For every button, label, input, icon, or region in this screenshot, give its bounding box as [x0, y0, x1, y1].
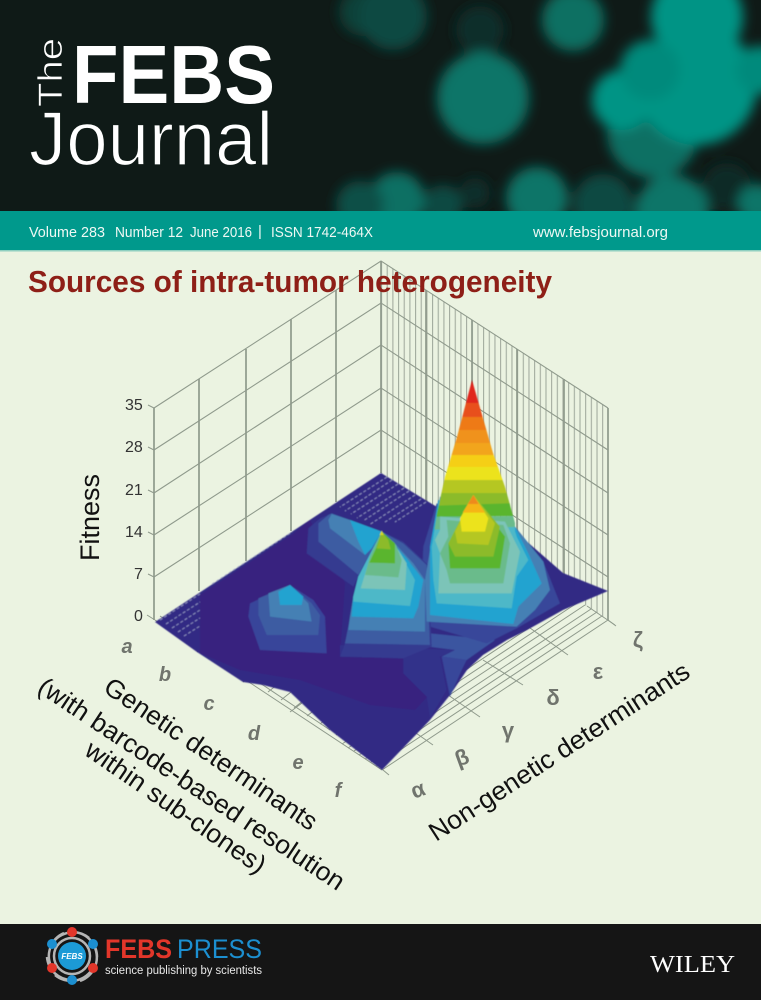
axis title: Genetic determinants: within sub-clones) [79, 734, 272, 880]
logo word: FEBS: FEBS [72, 28, 275, 121]
z-axis tick labels: 21 [125, 482, 143, 499]
non-genetic axis tick labels: α [407, 775, 429, 804]
footer bar [0, 924, 761, 1000]
non-genetic axis tick labels: γ [502, 718, 515, 743]
surface base [155, 378, 608, 770]
non-genetic axis tick labels: β [451, 743, 472, 772]
z-axis tick labels: 14 [125, 524, 143, 541]
z-axis tick labels: 28 [125, 439, 143, 456]
journal logo [29, 28, 275, 182]
Wiley wordmark: WILEY [650, 952, 735, 978]
tall peak spire bands [432, 380, 516, 540]
footer bar: PRESS [177, 934, 262, 964]
genetic axis tick labels: b [159, 664, 171, 686]
genetic axis tick labels [121, 636, 344, 802]
issue information band: www.febsjournal.org [532, 224, 668, 241]
secondary peak contours [435, 495, 520, 593]
z-axis tick labels: 35 [125, 397, 143, 414]
issue information band: ISSN 1742-464X [271, 224, 373, 241]
dome and middle peak [307, 513, 432, 658]
non-genetic axis tick labels: ζ [633, 627, 643, 652]
FEBS Press wordmark: FEBS [105, 934, 172, 964]
genetic axis tick labels: f [335, 780, 344, 802]
tall peak outer dark contour [420, 503, 560, 643]
axis title: Non-genetic determinants: Non-genetic determinants [423, 656, 695, 847]
non-genetic axis tick labels: ε [593, 659, 604, 684]
non-genetic axis tick labels: δ [546, 685, 560, 710]
lower star-shaped lobes around the peaks [340, 633, 495, 718]
issue information band: Number 12 [115, 224, 183, 241]
z-axis tick labels: 0 [134, 608, 143, 625]
genetic axis tick labels: d [248, 723, 261, 745]
genetic axis tick labels: a [121, 636, 133, 658]
header banner with teal cell micrograph [0, 0, 761, 211]
FEBS Press tagline: science publishing by scientists [105, 965, 262, 977]
axis title: Genetic determinants: (with barcode-based resolution [33, 671, 351, 896]
logo word: The: The [32, 38, 70, 107]
left small peak [248, 585, 327, 653]
3D surface chart [33, 261, 695, 896]
z-axis tick labels [125, 397, 143, 625]
cover title: Sources of intra-tumor heterogeneity [28, 264, 553, 299]
chart floor grid [147, 405, 616, 775]
chart back walls grid [154, 261, 609, 621]
issue information band: Volume 283 [29, 224, 105, 241]
logo word: Journal: Journal [29, 97, 273, 182]
FEBS Press logo icon: FEBS [61, 952, 83, 961]
y-axis title: Fitness: Fitness [75, 474, 105, 561]
issue information band [0, 211, 761, 252]
z-axis tick labels: 7 [134, 566, 143, 583]
issue information band: June 2016 [190, 224, 252, 241]
genetic axis tick labels: e [292, 752, 304, 774]
issue information band: | [258, 223, 262, 240]
mesh dashes on surface [160, 477, 426, 636]
lower blue contours of tall peak [425, 497, 550, 627]
non-genetic axis tick labels [407, 627, 643, 804]
genetic axis tick labels: c [203, 693, 215, 715]
FEBS Press logo icon [47, 927, 98, 985]
axis title: Genetic determinants: Genetic determinants [99, 671, 324, 836]
